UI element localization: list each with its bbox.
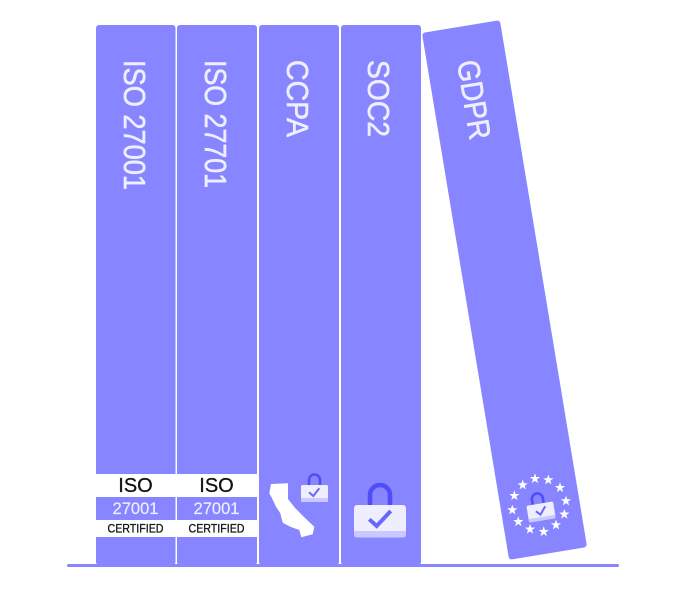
badge: ISO 27001 certified: CERTIFIED xyxy=(188,522,245,536)
book: ISO 27701 xyxy=(177,25,257,565)
badge: ISO 27001 certified: CERTIFIED xyxy=(108,522,164,536)
spine title: ISO 27701: ISO 27701 xyxy=(198,60,233,188)
badge: ISO 27001 certified: 27001 xyxy=(113,500,158,518)
spine title: ISO 27001: ISO 27001 xyxy=(117,60,152,190)
shelf line xyxy=(67,564,619,567)
spine title: CCPA: CCPA xyxy=(280,60,315,137)
badge: ISO 27001 certified: 27001 xyxy=(194,500,239,518)
icon: California map xyxy=(269,483,314,537)
icon: small padlock xyxy=(301,474,328,502)
icon: EU stars ring with padlock xyxy=(507,473,571,536)
spine title: SOC2: SOC2 xyxy=(361,60,396,137)
badge: ISO 27001 certified xyxy=(177,474,257,537)
book: GDPR (leaning) xyxy=(422,20,587,560)
badge: ISO 27001 certified: ISO xyxy=(118,475,153,497)
badge: ISO 27001 certified xyxy=(96,474,176,537)
book: ISO 27001 xyxy=(96,25,176,565)
icon: large padlock xyxy=(354,485,406,538)
book: SOC2 xyxy=(341,25,421,565)
book: CCPA xyxy=(259,25,339,565)
badge: ISO 27001 certified: ISO xyxy=(199,475,234,497)
spine title: GDPR: GDPR xyxy=(450,57,498,142)
